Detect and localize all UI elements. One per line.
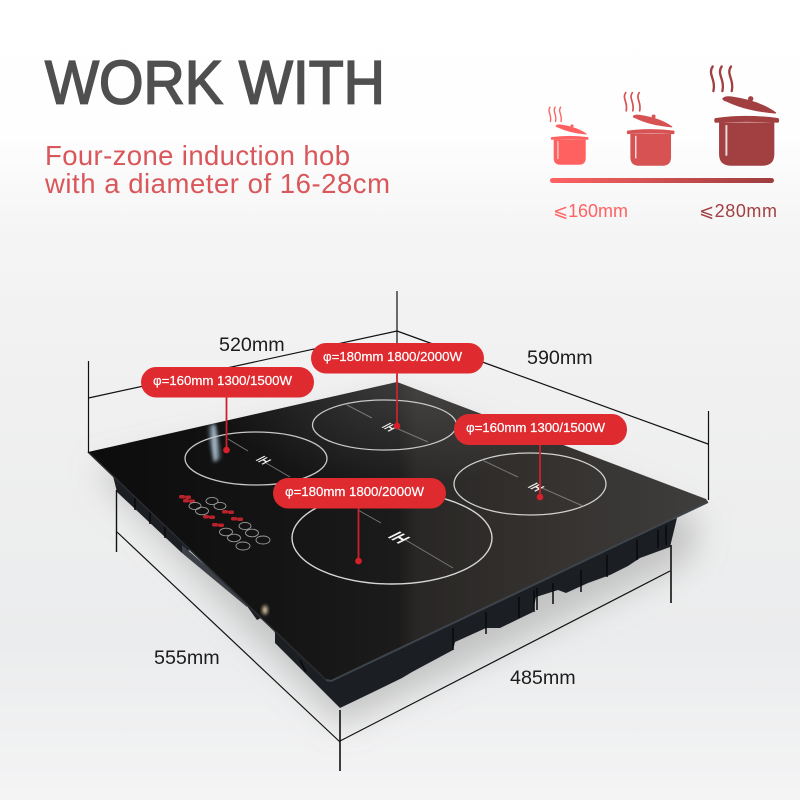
dimension: 590mm [397, 331, 708, 500]
callout: rear right zone [311, 343, 484, 429]
burner: rear left [185, 432, 327, 485]
burner: rear right [312, 400, 456, 450]
burner: front left [292, 492, 492, 584]
callout: rear left zone [141, 367, 314, 453]
dimension: 485mm [340, 545, 671, 771]
burner: rear left: IH [252, 454, 275, 467]
housing side strip [182, 545, 247, 607]
glass cooktop [88, 382, 708, 681]
icon: small pot [549, 107, 589, 165]
hob shadow [95, 400, 700, 725]
callout: front left zone: φ=180mm 1800/2000W [285, 484, 424, 499]
glass edge [326, 502, 708, 681]
subtitle: with a diameter of 16-28cm [44, 168, 390, 199]
subtitle [44, 140, 390, 199]
title: WORK WITH [45, 48, 385, 116]
burner: front left: IH [383, 529, 414, 546]
dimension: 555mm: 555mm [154, 647, 220, 669]
callout: front right zone [454, 414, 627, 500]
callout: front right zone: φ=160mm 1300/1500W [466, 420, 605, 435]
subtitle: Four-zone induction hob [45, 140, 350, 171]
dimension: 555mm [116, 490, 340, 742]
dimension: 520mm: 520mm [219, 334, 285, 356]
callout: rear right zone: φ=180mm 1800/2000W [323, 349, 462, 364]
label: 160mm: ⩽160mm [553, 201, 628, 222]
label: 280mm: ⩽280mm [699, 201, 777, 222]
icon: medium pot [624, 93, 675, 166]
touch control panel [179, 495, 270, 550]
dimension: 485mm: 485mm [510, 667, 576, 689]
hob housing [113, 476, 677, 708]
reflections [207, 424, 222, 462]
induction hob [88, 382, 708, 708]
burner: front right [454, 453, 606, 515]
pot size scale [549, 66, 779, 222]
dimension: 590mm: 590mm [527, 347, 593, 369]
dimension: 520mm [88, 291, 397, 453]
callout: rear left zone: φ=160mm 1300/1500W [153, 373, 292, 388]
icon: large pot [711, 66, 779, 166]
burner: rear right: IH [378, 421, 401, 434]
callout: front left zone [273, 478, 446, 564]
burner: front right: IH [524, 480, 548, 494]
size scale bar [550, 178, 774, 183]
